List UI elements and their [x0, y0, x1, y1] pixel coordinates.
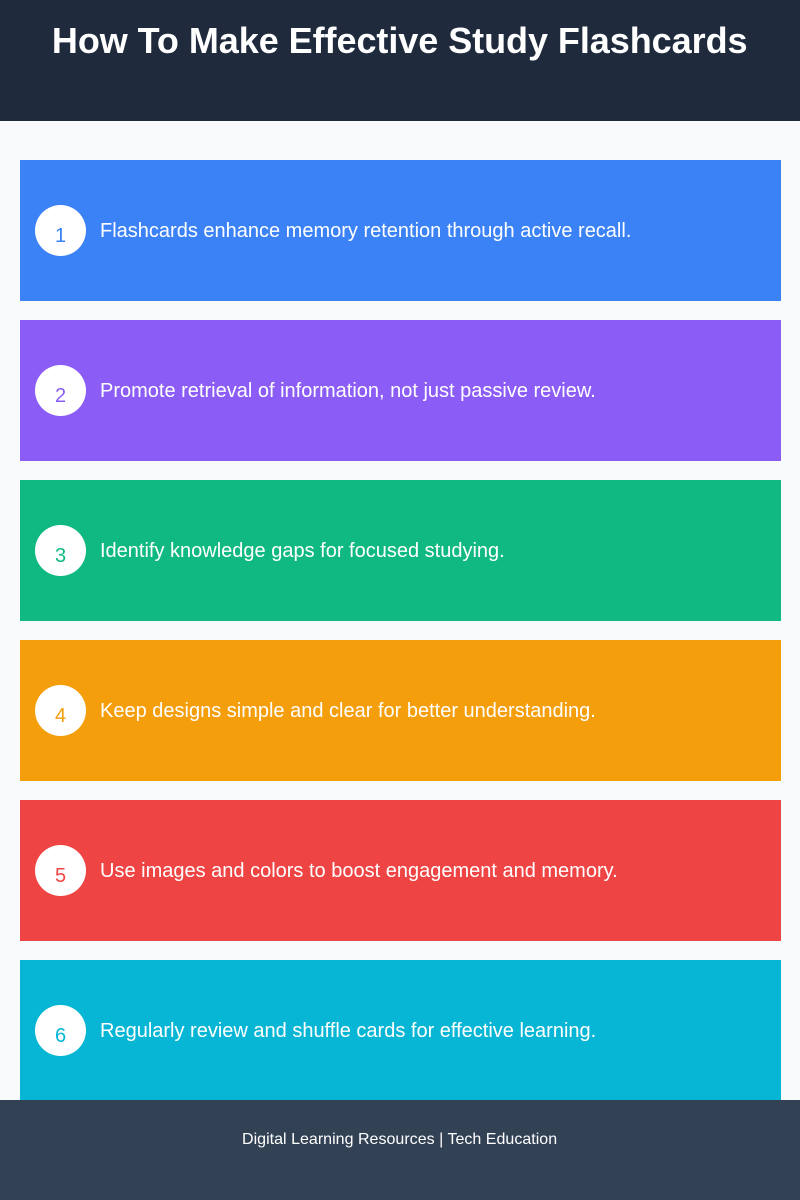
step 4 text: Keep designs simple and clear for better understanding.: [100, 700, 596, 722]
header band: [0, 0, 800, 121]
panel: step 2: [20, 320, 781, 461]
footer text: Digital Learning Resources | Tech Education: [242, 1131, 557, 1148]
panel: step 1: [20, 160, 781, 301]
step number 4: 4: [55, 705, 66, 727]
panel: step 3: [20, 480, 781, 621]
step number 1: 1: [55, 225, 66, 247]
footer band: [0, 1100, 800, 1200]
step number 3: [35, 525, 86, 576]
step number 5: [35, 845, 86, 896]
step number 1: [35, 205, 86, 256]
title: How To Make Effective Study Flashcards: [52, 20, 748, 61]
step 1 text: Flashcards enhance memory retention through active recall.: [100, 220, 631, 242]
panel: step 4: [20, 640, 781, 781]
panel: step 5: [20, 800, 781, 941]
step number 5: 5: [55, 865, 66, 887]
step number 2: [35, 365, 86, 416]
step 2 text: Promote retrieval of information, not just passive review.: [100, 380, 596, 402]
step 5 text: Use images and colors to boost engagement and memory.: [100, 860, 618, 882]
step number 6: 6: [55, 1025, 66, 1047]
step 6 text: Regularly review and shuffle cards for effective learning.: [100, 1020, 596, 1042]
step number 6: [35, 1005, 86, 1056]
step 3 text: Identify knowledge gaps for focused studying.: [100, 540, 505, 562]
panel: step 6: [20, 960, 781, 1101]
step number 4: [35, 685, 86, 736]
step number 3: 3: [55, 545, 66, 567]
step number 2: 2: [55, 385, 66, 407]
